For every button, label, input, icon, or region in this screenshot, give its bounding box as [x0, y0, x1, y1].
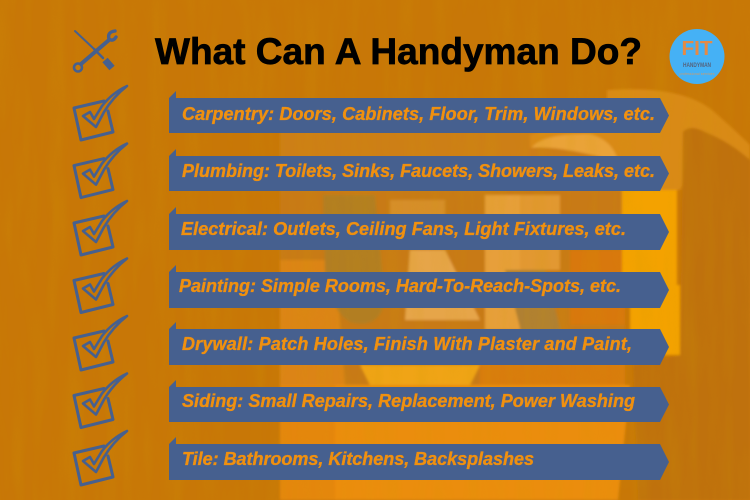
banner: siding [169, 380, 669, 422]
logo: Fit Handyman badge: FIT [682, 38, 712, 60]
banner: carpentry [169, 91, 669, 133]
logo: Fit Handyman badge [670, 29, 724, 84]
banner: drywall [169, 322, 669, 365]
checkmark icon 2 [74, 144, 127, 198]
icon: crossed wrench and screwdriver [74, 31, 116, 72]
banner: tile [169, 437, 669, 480]
banner: carpentry: Carpentry: Doors, Cabinets, Floor, Trim, Windows, etc. [182, 104, 655, 124]
banner: siding: Siding: Small Repairs, Replacement, Power Washing [182, 391, 635, 411]
checkmark icon 4 [74, 258, 127, 312]
banner: plumbing [169, 149, 669, 191]
banner: tile: Tile: Bathrooms, Kitchens, Backsplashes [182, 449, 534, 469]
banner: plumbing: Plumbing: Toilets, Sinks, Faucets, Showers, Leaks, etc. [182, 161, 655, 181]
banner: painting [169, 265, 669, 308]
checkmark icon 3 [74, 201, 127, 255]
checkmark icon 6 [74, 374, 127, 428]
banner: drywall: Drywall: Patch Holes, Finish With Plaster and Paint, [182, 334, 632, 354]
checkmark icon 1 [74, 86, 127, 140]
checkmark icon 7 [74, 431, 127, 485]
banner: painting: Painting: Simple Rooms, Hard-To-Reach-Spots, etc. [179, 276, 621, 296]
checkmark icon 5 [74, 316, 127, 370]
title: What Can A Handyman Do? [155, 31, 642, 72]
logo: Fit Handyman badge: HANDYMAN [683, 62, 711, 69]
banner: electrical [169, 207, 669, 250]
logo: Fit Handyman badge: professional services [680, 72, 715, 76]
banner: electrical: Electrical: Outlets, Ceiling Fans, Light Fixtures, etc. [181, 219, 626, 239]
